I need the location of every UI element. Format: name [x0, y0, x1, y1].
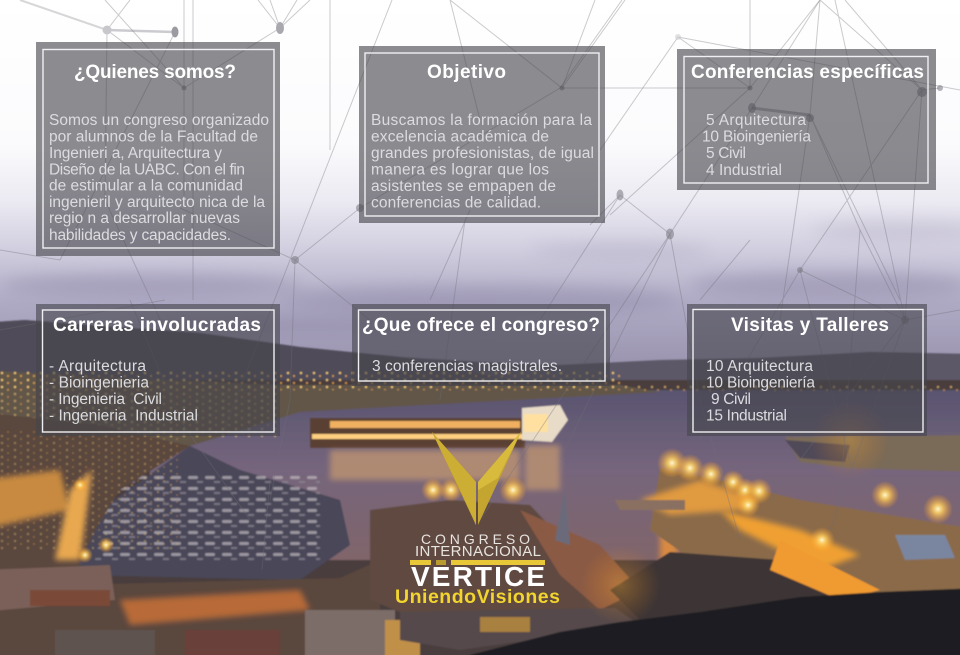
text block: quienes somos: por alumnos de la Facultad de: [49, 128, 258, 146]
list: conferencias por carrera: [702, 112, 811, 179]
panel: objetivo: [359, 46, 605, 223]
clouds: [0, 220, 960, 333]
heading: qué ofrece: ¿Que ofrece el congreso?: [362, 315, 600, 336]
list: conferencias por carrera: 5 Civil: [706, 145, 746, 162]
text block: objetivo: excelencia académica de: [371, 128, 549, 146]
text block: quienes somos: Somos un congreso organizado: [49, 112, 269, 129]
panel: visitas y talleres: [687, 304, 927, 436]
heading: carreras involucradas: Carreras involucradas: [53, 315, 261, 336]
water reflections: [330, 445, 678, 565]
bottom dark hill: [470, 588, 960, 655]
list: visitas: 15 Industrial: [706, 408, 787, 424]
logo: congreso internacional vértice: INTERNACIONAL: [415, 543, 541, 560]
text block: quienes somos: Ingenieri a, Arquitectura y: [49, 145, 222, 162]
list: visitas: 9 Civil: [711, 391, 751, 408]
text block: quienes somos: de estimular a la comunidad: [49, 178, 243, 194]
list: carreras: - Ingenieria Civil: [49, 391, 162, 408]
heading: conferencias específicas: Conferencias específicas: [691, 62, 924, 83]
right port land: [650, 468, 960, 600]
panel: carreras involucradas: [36, 304, 280, 436]
text block: quienes somos: habilidades y capacidades.: [49, 227, 231, 244]
logo: congreso internacional vértice: VERTICE: [411, 561, 545, 592]
heading: quienes somos: ¿Quienes somos?: [74, 62, 236, 83]
list: carreras: - Ingenieria Industrial: [49, 408, 198, 424]
marina: [75, 446, 350, 580]
panel: conferencias específicas: [677, 49, 936, 190]
list: carreras: [49, 358, 198, 424]
text block: quienes somos: ingenieril y arquitecto nica de la: [49, 194, 265, 211]
text block: quienes somos: [49, 112, 269, 244]
central pier: [370, 500, 610, 620]
list: conferencias por carrera: 4 Industrial: [706, 162, 782, 179]
icon: gold V: [432, 432, 521, 525]
text block: objetivo: grandes profesionistas, de igual: [371, 145, 594, 162]
text block: objetivo: conferencias de calidad.: [371, 194, 541, 212]
list: visitas: [706, 358, 815, 424]
logo: congreso internacional vértice: [395, 432, 560, 608]
list: conferencias por carrera: 10 Bioingeniería: [702, 128, 811, 146]
city band: [0, 370, 660, 446]
mountains: [0, 320, 960, 410]
logo: congreso internacional vértice: UniendoVisiones: [395, 586, 560, 608]
list: carreras: - Arquitectura: [49, 358, 146, 375]
panel: ¿Quienes somos?: [36, 42, 280, 256]
list: visitas: 10 Bioingeniería: [706, 374, 815, 392]
network nodes: [102, 22, 943, 324]
panel: qué ofrece el congreso: [352, 304, 610, 386]
text block: objetivo: asistentes se empapen de: [371, 178, 556, 195]
land and water base: [0, 380, 960, 655]
text block: quienes somos: regio n a desarrollar nuevas: [49, 210, 240, 227]
cruise ships: [310, 418, 525, 448]
list: conferencias por carrera: 5 Arquitectura: [706, 112, 806, 129]
heading: visitas y talleres: Visitas y Talleres: [731, 315, 889, 336]
text block: objetivo: [371, 112, 594, 212]
text block: objetivo: Buscamos la formación para la: [371, 112, 592, 129]
light glows: [73, 400, 953, 625]
text block: quienes somos: Diseño de la UABC. Con el fin: [49, 162, 245, 178]
logo text: CONGRESO: [421, 531, 530, 547]
list: visitas: 10 Arquitectura: [706, 358, 813, 375]
text block: qué ofrece: 3 conferencias magistrales.: [372, 358, 562, 375]
heading: objetivo: Objetivo: [427, 62, 506, 83]
text block: objetivo: manera es lograr que los: [371, 162, 549, 178]
left land: [0, 412, 380, 655]
list: carreras: - Bioingenieria: [49, 374, 149, 392]
